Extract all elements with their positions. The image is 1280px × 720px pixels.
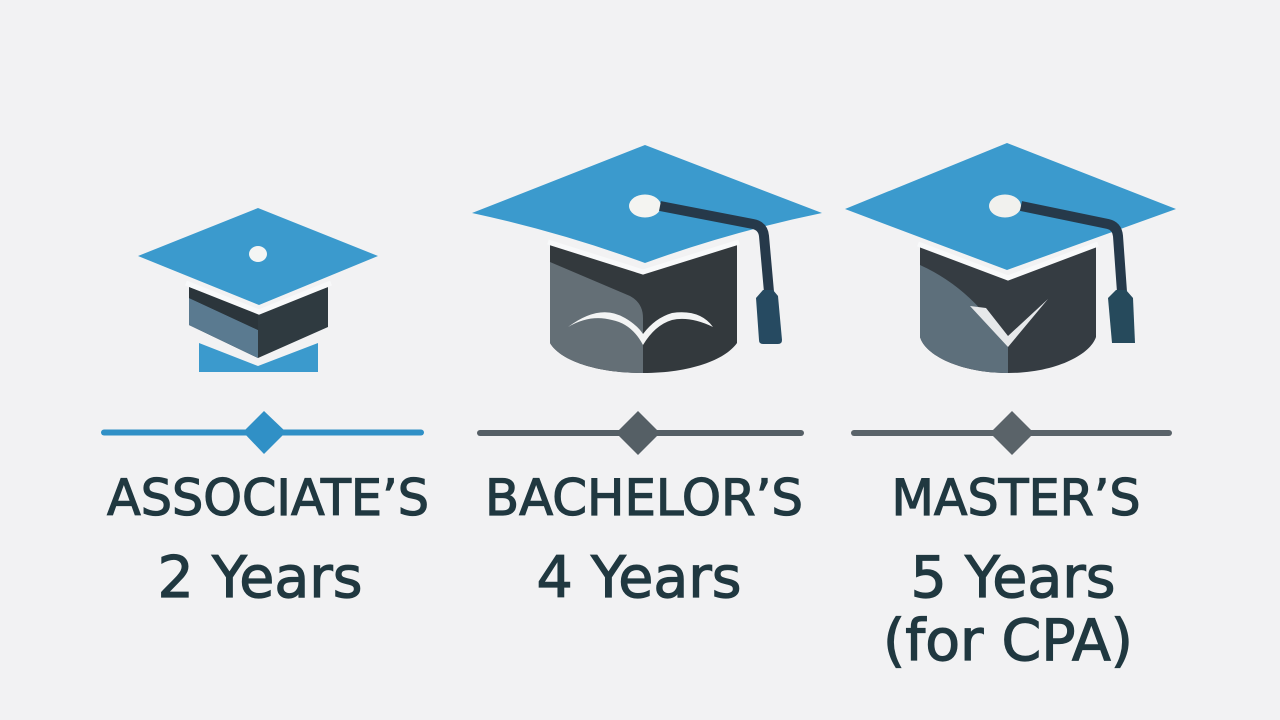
duration: 4 years: 4 Years [536, 545, 742, 611]
icon: associate's cap [138, 208, 378, 372]
duration: 5 years: 5 Years [910, 545, 1116, 611]
divider: associate's [101, 411, 424, 454]
divider: bachelor's [477, 411, 804, 455]
icon: bachelor's cap [472, 145, 822, 373]
icon: master's cap [845, 143, 1176, 373]
label: associate's: ASSOCIATE’S [107, 469, 429, 527]
note: for CPA: (for CPA) [883, 608, 1133, 674]
label: master's: MASTER’S [892, 469, 1140, 527]
duration: 2 years: 2 Years [158, 545, 362, 611]
label: bachelor's: BACHELOR’S [485, 469, 803, 527]
divider: master's [851, 411, 1172, 455]
